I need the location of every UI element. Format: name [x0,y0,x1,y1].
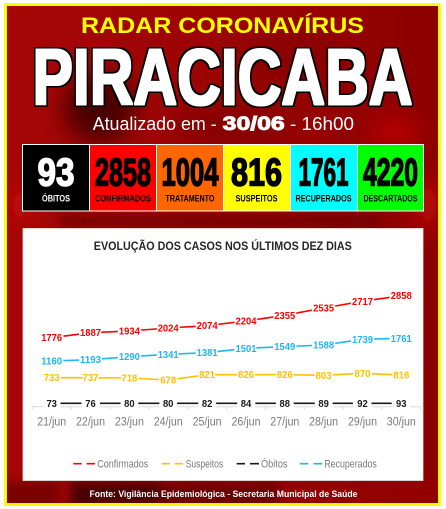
series: confirmados: 1776 [41,333,62,344]
series: óbitos: 88 [280,399,290,410]
series: óbitos: 84 [241,399,251,410]
chart panel [23,228,423,480]
tile: recuperados: 1761 [298,152,348,194]
tile: tratamento: 1004 [162,152,219,194]
tile: descartados: DESCARTADOS [364,194,418,204]
x axis: 27/jun [270,417,299,429]
series: recuperados: 1290 [119,352,140,363]
series: confirmados: 2535 [313,304,334,314]
series: suspeitos: 733 [44,373,60,384]
series: óbitos: 73 [46,399,57,410]
x axis: 24/jun [154,417,183,429]
x axis: 21/jun [37,417,66,429]
series: suspeitos [44,369,410,386]
series: confirmados: 2858 [391,291,412,302]
tile: recuperados: RECUPERADOS [296,194,352,204]
x axis: 26/jun [232,417,260,429]
series: recuperados: 1160 [41,356,62,368]
update date line: Atualizado em - [93,113,217,134]
series: óbitos: 92 [357,399,368,410]
update date line: 30/06 [223,114,285,135]
series: suspeitos: 718 [121,374,138,384]
series: recuperados: 1739 [352,335,373,346]
series: óbitos: 80 [163,399,174,410]
chart title: EVOLUÇÃO DOS CASOS NOS ÚLTIMOS DEZ DIAS [94,238,352,253]
update date line: - 16h00 [290,113,354,134]
legend [73,458,377,470]
x axis: 29/jun [348,417,377,429]
series: confirmados [41,291,412,344]
update date line [93,113,354,135]
series: suspeitos: 870 [354,369,371,380]
series: confirmados: 1887 [80,328,101,339]
series: confirmados: 2024 [158,324,179,334]
series: recuperados: 1341 [158,350,179,361]
series: óbitos: 82 [202,399,213,410]
series: suspeitos: 737 [82,373,99,384]
series: recuperados: 1761 [391,334,412,345]
series: confirmados: 2717 [352,297,373,308]
tile: descartados [358,145,423,210]
series: recuperados: 1549 [274,342,296,353]
series: confirmados: 2355 [274,311,296,322]
x axis: 30/jun [387,417,416,429]
series: recuperados [41,334,412,368]
series: óbitos: 89 [318,399,329,410]
series: suspeitos: 678 [160,376,176,386]
series: confirmados: 1934 [119,326,140,338]
tile: recuperados [291,145,357,210]
series: suspeitos: 803 [316,371,332,382]
tile: confirmados: 2858 [95,152,151,194]
series: óbitos: 93 [396,399,407,410]
x axis: 23/jun [115,417,144,429]
tile: confirmados: CONFIRMADOS [95,194,151,204]
series: suspeitos: 826 [277,370,293,381]
legend: Confirmados [97,458,149,470]
series: suspeitos: 816 [393,370,410,382]
tile: suspeitos: SUSPEITOS [236,194,278,204]
tile: óbitos: ÓBITOS [42,192,70,204]
tile: tratamento: TRATAMENTO [166,194,214,204]
tile: tratamento [157,145,223,210]
series: confirmados: 2074 [197,321,218,332]
tile: óbitos: 93 [38,152,74,194]
heading: Radar Coronavírus: RADAR CORONAVÍRUS [81,13,364,38]
legend: Óbitos [261,458,288,470]
legend: Suspeitos [186,458,224,470]
x axis: 22/jun [76,417,105,429]
tile: suspeitos: 816 [231,152,282,194]
series: suspeitos: 821 [199,370,215,381]
tile: suspeitos [224,145,290,210]
series: suspeitos: 826 [238,370,254,381]
series: óbitos [46,399,407,410]
legend: Recuperados [324,458,377,470]
series: óbitos: 80 [124,399,135,410]
tile: óbitos [23,145,89,210]
series: recuperados: 1193 [80,355,101,366]
series: confirmados: 2204 [236,316,257,328]
series: recuperados: 1501 [236,344,257,355]
x axis [32,407,421,429]
x axis: 28/jun [309,417,338,429]
series: recuperados: 1588 [313,340,334,352]
tile: confirmados [90,145,156,210]
series: recuperados: 1381 [197,348,218,359]
source footer: Fonte: Vigilância Epidemiológica - Secretaria Municipal de Saúde [90,489,358,500]
x axis: 25/jun [193,417,222,429]
stat tiles row [22,144,424,212]
series: óbitos: 76 [85,399,96,410]
